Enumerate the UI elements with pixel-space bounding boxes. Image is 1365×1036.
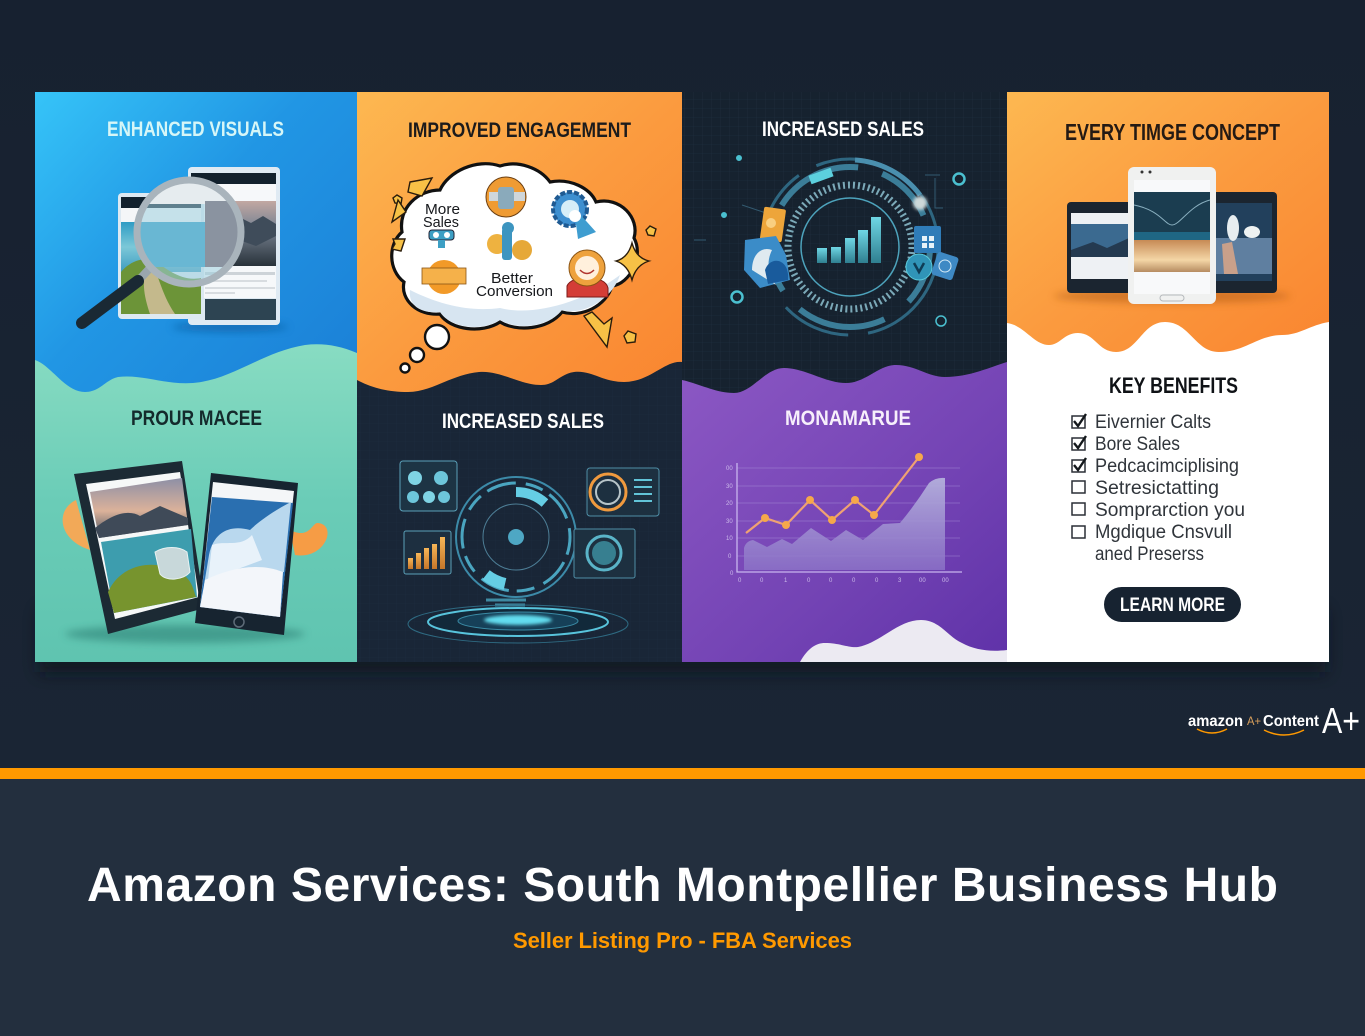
chart axis labels: 00	[919, 578, 926, 584]
heading: every timge concept: EVERY TIMGE CONCEPT	[1065, 119, 1280, 145]
glowing nodes	[722, 156, 964, 326]
chart axis labels: 0	[728, 554, 732, 560]
checklist labels: aned Preserss	[1095, 544, 1204, 565]
icon: smiling person	[567, 250, 608, 297]
thought cloud	[392, 164, 637, 329]
card: orange rings	[587, 468, 659, 516]
thought bubbles	[400, 325, 449, 372]
chart axis labels: 10	[726, 536, 733, 542]
chart axis labels: 30	[726, 484, 733, 490]
app badges right	[906, 226, 959, 281]
icon: orange camera coin	[422, 260, 466, 294]
text: conversion: Conversion	[476, 284, 553, 300]
icon: key and gears	[487, 222, 532, 260]
chart axis labels: 0	[738, 578, 742, 584]
icon: binocular robot	[429, 230, 454, 248]
icon: tablets under a magnifying glass	[82, 167, 288, 332]
logo: amazon a+ content: Content	[1263, 713, 1320, 730]
bar chart icon	[817, 217, 881, 263]
subtitle: Seller Listing Pro - FBA Services	[513, 928, 852, 953]
chart axis labels: 3	[898, 578, 902, 584]
line and area chart	[726, 453, 962, 584]
panel: product showcase	[35, 340, 357, 662]
panel: improved engagement	[357, 92, 682, 392]
panel: increased sales radar	[357, 360, 682, 662]
heading: monamarue: MONAMARUE	[785, 407, 911, 430]
heading: enhanced visuals: ENHANCED VISUALS	[107, 118, 284, 141]
checklist	[1072, 412, 1245, 565]
checklist labels: Mgdique Cnsvull	[1095, 522, 1232, 543]
chart axis labels: 0	[730, 571, 734, 577]
chart axis labels: 0	[760, 578, 764, 584]
text: more sales: More	[425, 202, 460, 218]
chart axis labels: 0	[852, 578, 856, 584]
logo: amazon a+ content: amazon	[1188, 713, 1243, 730]
footer band	[0, 779, 1365, 1036]
panel: increased sales chart hub	[682, 92, 1007, 392]
heading: increased sales: INCREASED SALES	[762, 118, 924, 141]
logo: amazon a+ content	[1188, 700, 1360, 741]
heading: increased sales: INCREASED SALES	[442, 410, 604, 433]
icon: three phones	[1054, 167, 1290, 304]
panel: enhanced visuals	[35, 92, 357, 392]
white wave accent	[800, 620, 1007, 662]
orange accent bar	[0, 768, 1365, 779]
checkboxes	[1072, 414, 1086, 538]
radar dial	[456, 477, 576, 605]
card: bar chart	[404, 531, 451, 574]
panel grid drop shadow	[40, 610, 1325, 672]
chart axis labels: 0	[807, 578, 811, 584]
hologram platform	[408, 605, 628, 643]
heading: prour macee: PROUR MACEE	[131, 407, 262, 430]
checklist labels: Somprarction you	[1095, 500, 1245, 521]
icon: orange robot head	[486, 177, 526, 217]
button: learn more: LEARN MORE	[1120, 595, 1225, 616]
checklist labels: Bore Sales	[1095, 434, 1180, 455]
icon: blue gear	[553, 192, 596, 239]
heading: improved engagement: IMPROVED ENGAGEMENT	[408, 119, 631, 142]
app badges left	[744, 207, 790, 288]
panel: monamarue chart	[682, 362, 1007, 662]
checklist labels	[1095, 412, 1245, 565]
sparkle accents	[392, 178, 656, 347]
checklist labels: Setresictatting	[1095, 478, 1219, 499]
chart axis labels: 0	[829, 578, 833, 584]
chart axis labels: 30	[726, 519, 733, 525]
text: sales: Sales	[423, 215, 459, 231]
chart axis labels: 00	[726, 466, 733, 472]
chart axis labels: 00	[942, 578, 949, 584]
icon: tablet and phone with photos	[63, 461, 328, 643]
chart axis labels: 0	[875, 578, 879, 584]
text: better: Better	[491, 271, 533, 287]
dark hero background	[0, 0, 1365, 768]
chart axis labels	[726, 466, 949, 584]
chart axis labels: 1	[784, 578, 788, 584]
button: learn more	[1104, 587, 1241, 622]
logo: amazon a+ content: A+	[1247, 714, 1261, 728]
card: gauge	[574, 529, 635, 578]
checklist labels: Eivernier Calts	[1095, 412, 1211, 433]
dial with circuit rings	[694, 159, 943, 335]
card: circles	[400, 461, 457, 511]
panel: key benefits	[1007, 92, 1329, 662]
checklist labels: Pedcacimciplising	[1095, 456, 1239, 477]
title: Amazon Services: South Montpellier Business Hub	[87, 859, 1278, 912]
heading: key benefits: KEY BENEFITS	[1109, 373, 1238, 398]
chart axis labels: 20	[726, 501, 733, 507]
